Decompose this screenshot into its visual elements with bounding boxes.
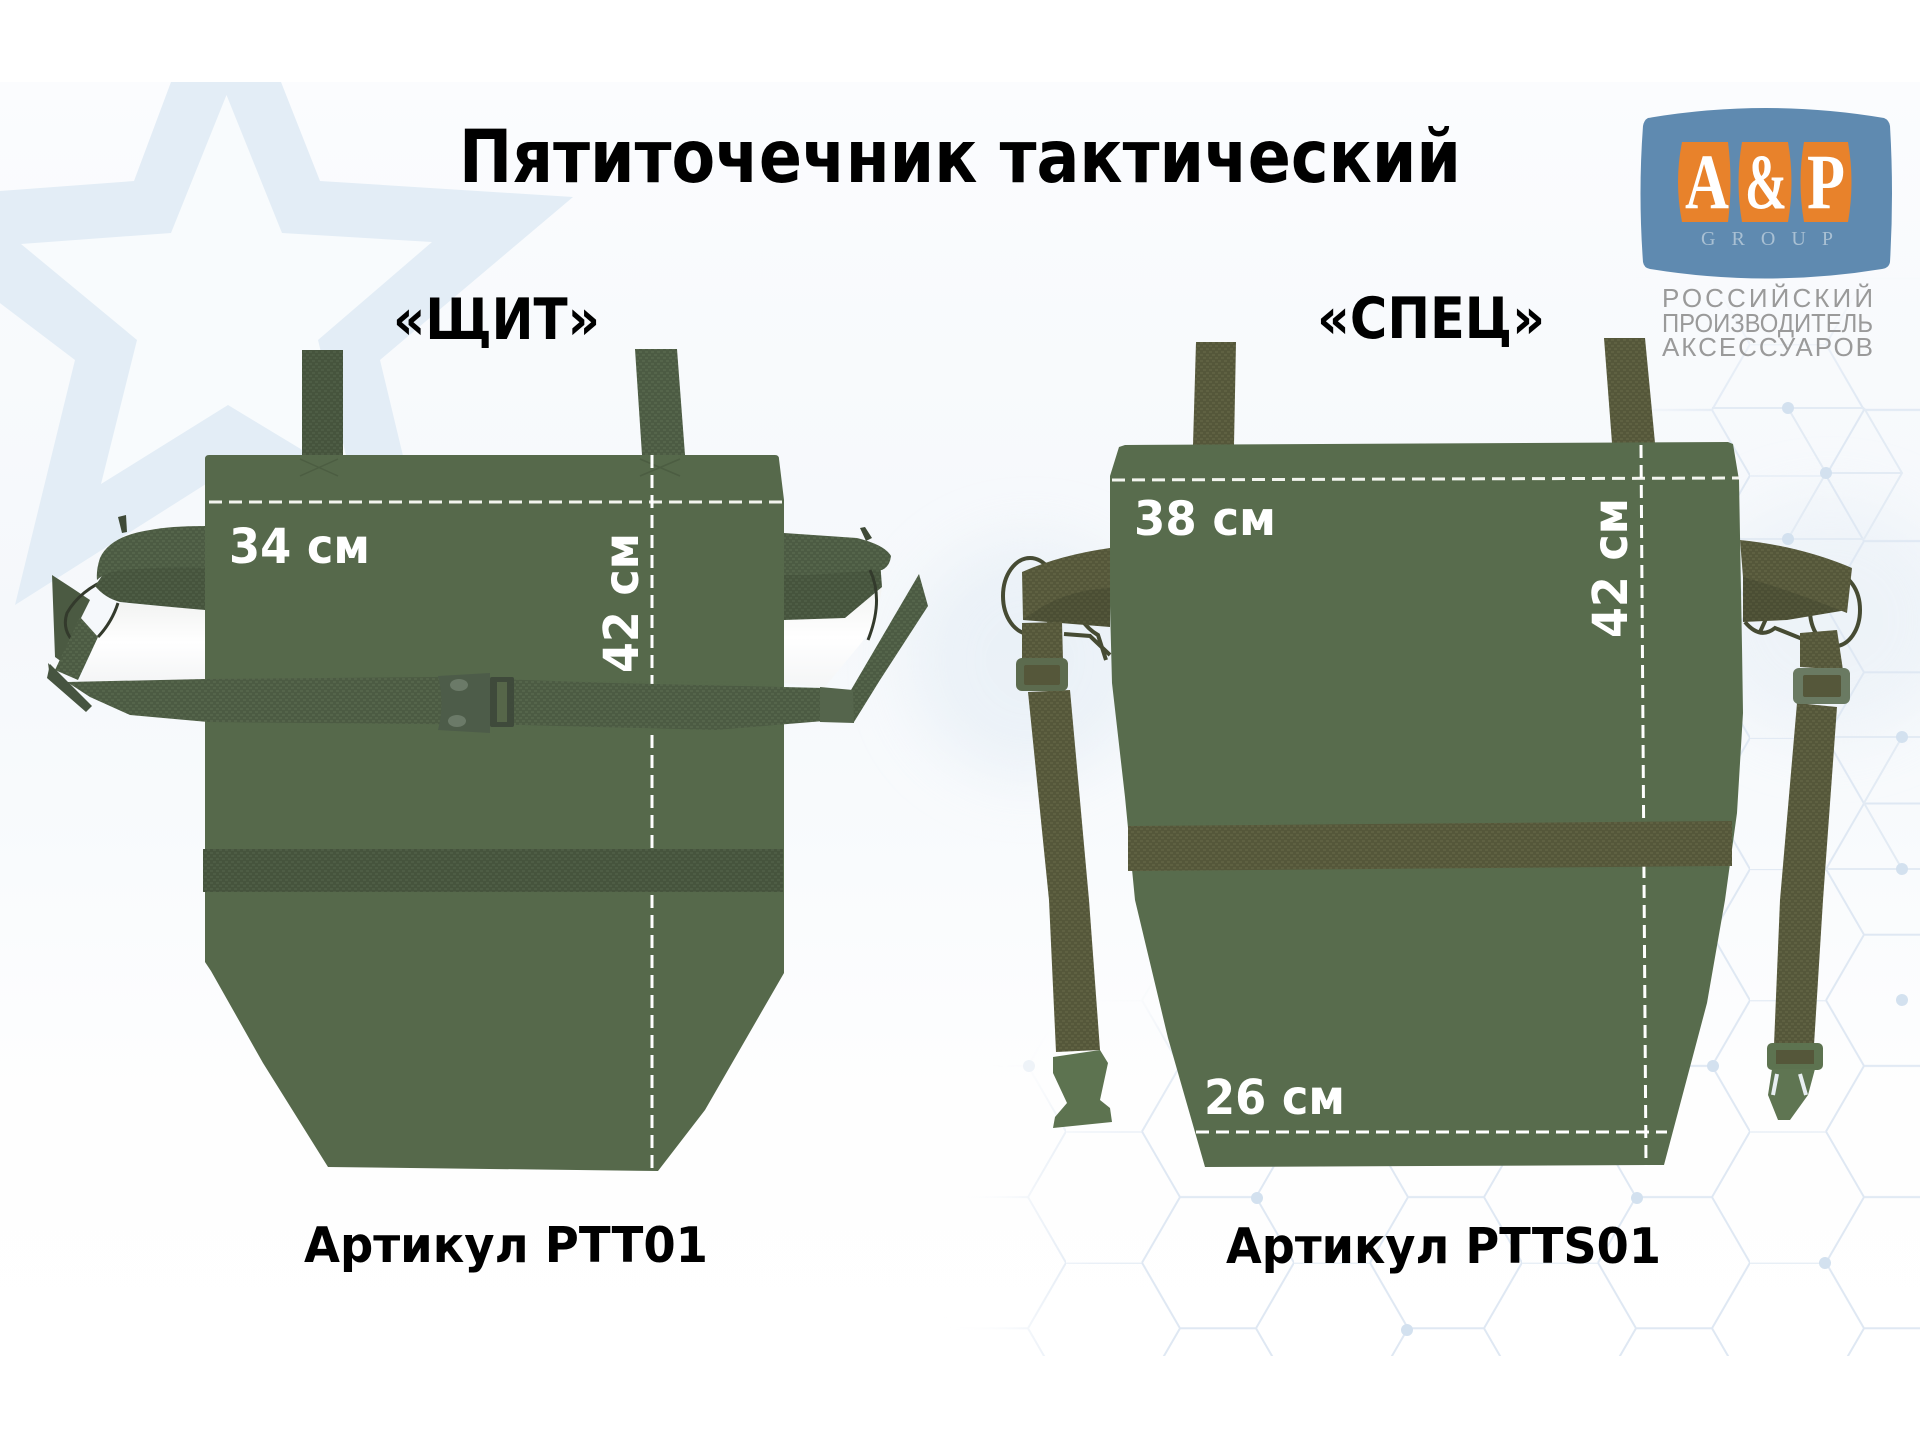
body: tabs <box>1193 342 1236 445</box>
logo tagline: ПРОИЗВОДИТЕЛЬ <box>1662 308 1873 338</box>
logo tiles <box>1678 142 1852 222</box>
label: 34 см: 34 см <box>229 519 370 575</box>
right side straps <box>784 527 928 722</box>
label: 42 см vertical: 42 см <box>1583 498 1639 638</box>
upper right network lines and nodes <box>1251 402 1920 1336</box>
logo tagline: АКСЕССУАРОВ <box>1662 332 1873 362</box>
left cords and ring <box>1003 558 1110 660</box>
label: 42 см vertical: 42 см <box>594 533 650 673</box>
dashed height line <box>650 455 654 1172</box>
left wing straps <box>1022 548 1110 660</box>
lower strap <box>203 849 783 892</box>
left clip buckle <box>1053 1050 1112 1128</box>
right cords and ring <box>1745 574 1860 646</box>
label: 26 см: 26 см <box>1204 1070 1345 1126</box>
right belt slider <box>820 687 854 723</box>
dashed height line <box>1641 445 1646 1166</box>
logo letters <box>1685 138 1845 225</box>
hexagon network pattern <box>1015 322 1920 1356</box>
panel: СПЕЦ product <box>1003 338 1860 1167</box>
bottom white band <box>0 1356 1920 1440</box>
panel: ЩИТ product <box>47 349 928 1172</box>
right wing straps <box>1740 540 1852 670</box>
logo plate <box>1640 108 1892 278</box>
hex node far left <box>1023 1060 1035 1072</box>
waist belt <box>67 677 824 730</box>
heading: ЩИТ: «ЩИТ» <box>393 287 600 353</box>
right slider <box>1793 668 1850 704</box>
buckle <box>438 673 514 733</box>
left side straps <box>48 515 205 706</box>
body stitching marks <box>300 459 680 476</box>
logo: A&P Group <box>1640 108 1892 278</box>
logo letters: P <box>1807 138 1845 225</box>
lower strap <box>1128 821 1732 871</box>
body: tabs <box>302 350 343 455</box>
logo tagline <box>1662 283 1873 362</box>
dashed width line <box>209 500 783 504</box>
left slider <box>1016 658 1068 691</box>
logo subtitle GROUP: GROUP <box>1701 228 1833 250</box>
right long strap <box>1774 703 1837 1045</box>
body: shield fabric <box>205 455 784 1171</box>
background star emblem <box>0 82 573 610</box>
logo letters: & <box>1745 138 1787 225</box>
left belt slider <box>47 664 92 712</box>
title: Пятиточечник тактический <box>459 115 1461 200</box>
heading: СПЕЦ: «СПЕЦ» <box>1317 286 1545 352</box>
left long strap <box>1028 690 1100 1052</box>
label: 38 см: 38 см <box>1134 492 1276 547</box>
dashed width line bottom <box>1196 1130 1667 1134</box>
logo tagline: РОССИЙСКИЙ <box>1662 283 1873 313</box>
dashed width line top <box>1112 478 1739 480</box>
article number left: Артикул PTT01 <box>304 1217 708 1274</box>
body: spec fabric <box>1110 442 1743 1167</box>
right lower slider and clip <box>1767 1043 1823 1120</box>
white pad behind straps <box>80 587 882 688</box>
article number right: Артикул PTTS01 <box>1226 1218 1661 1275</box>
logo letters: A <box>1685 138 1729 225</box>
